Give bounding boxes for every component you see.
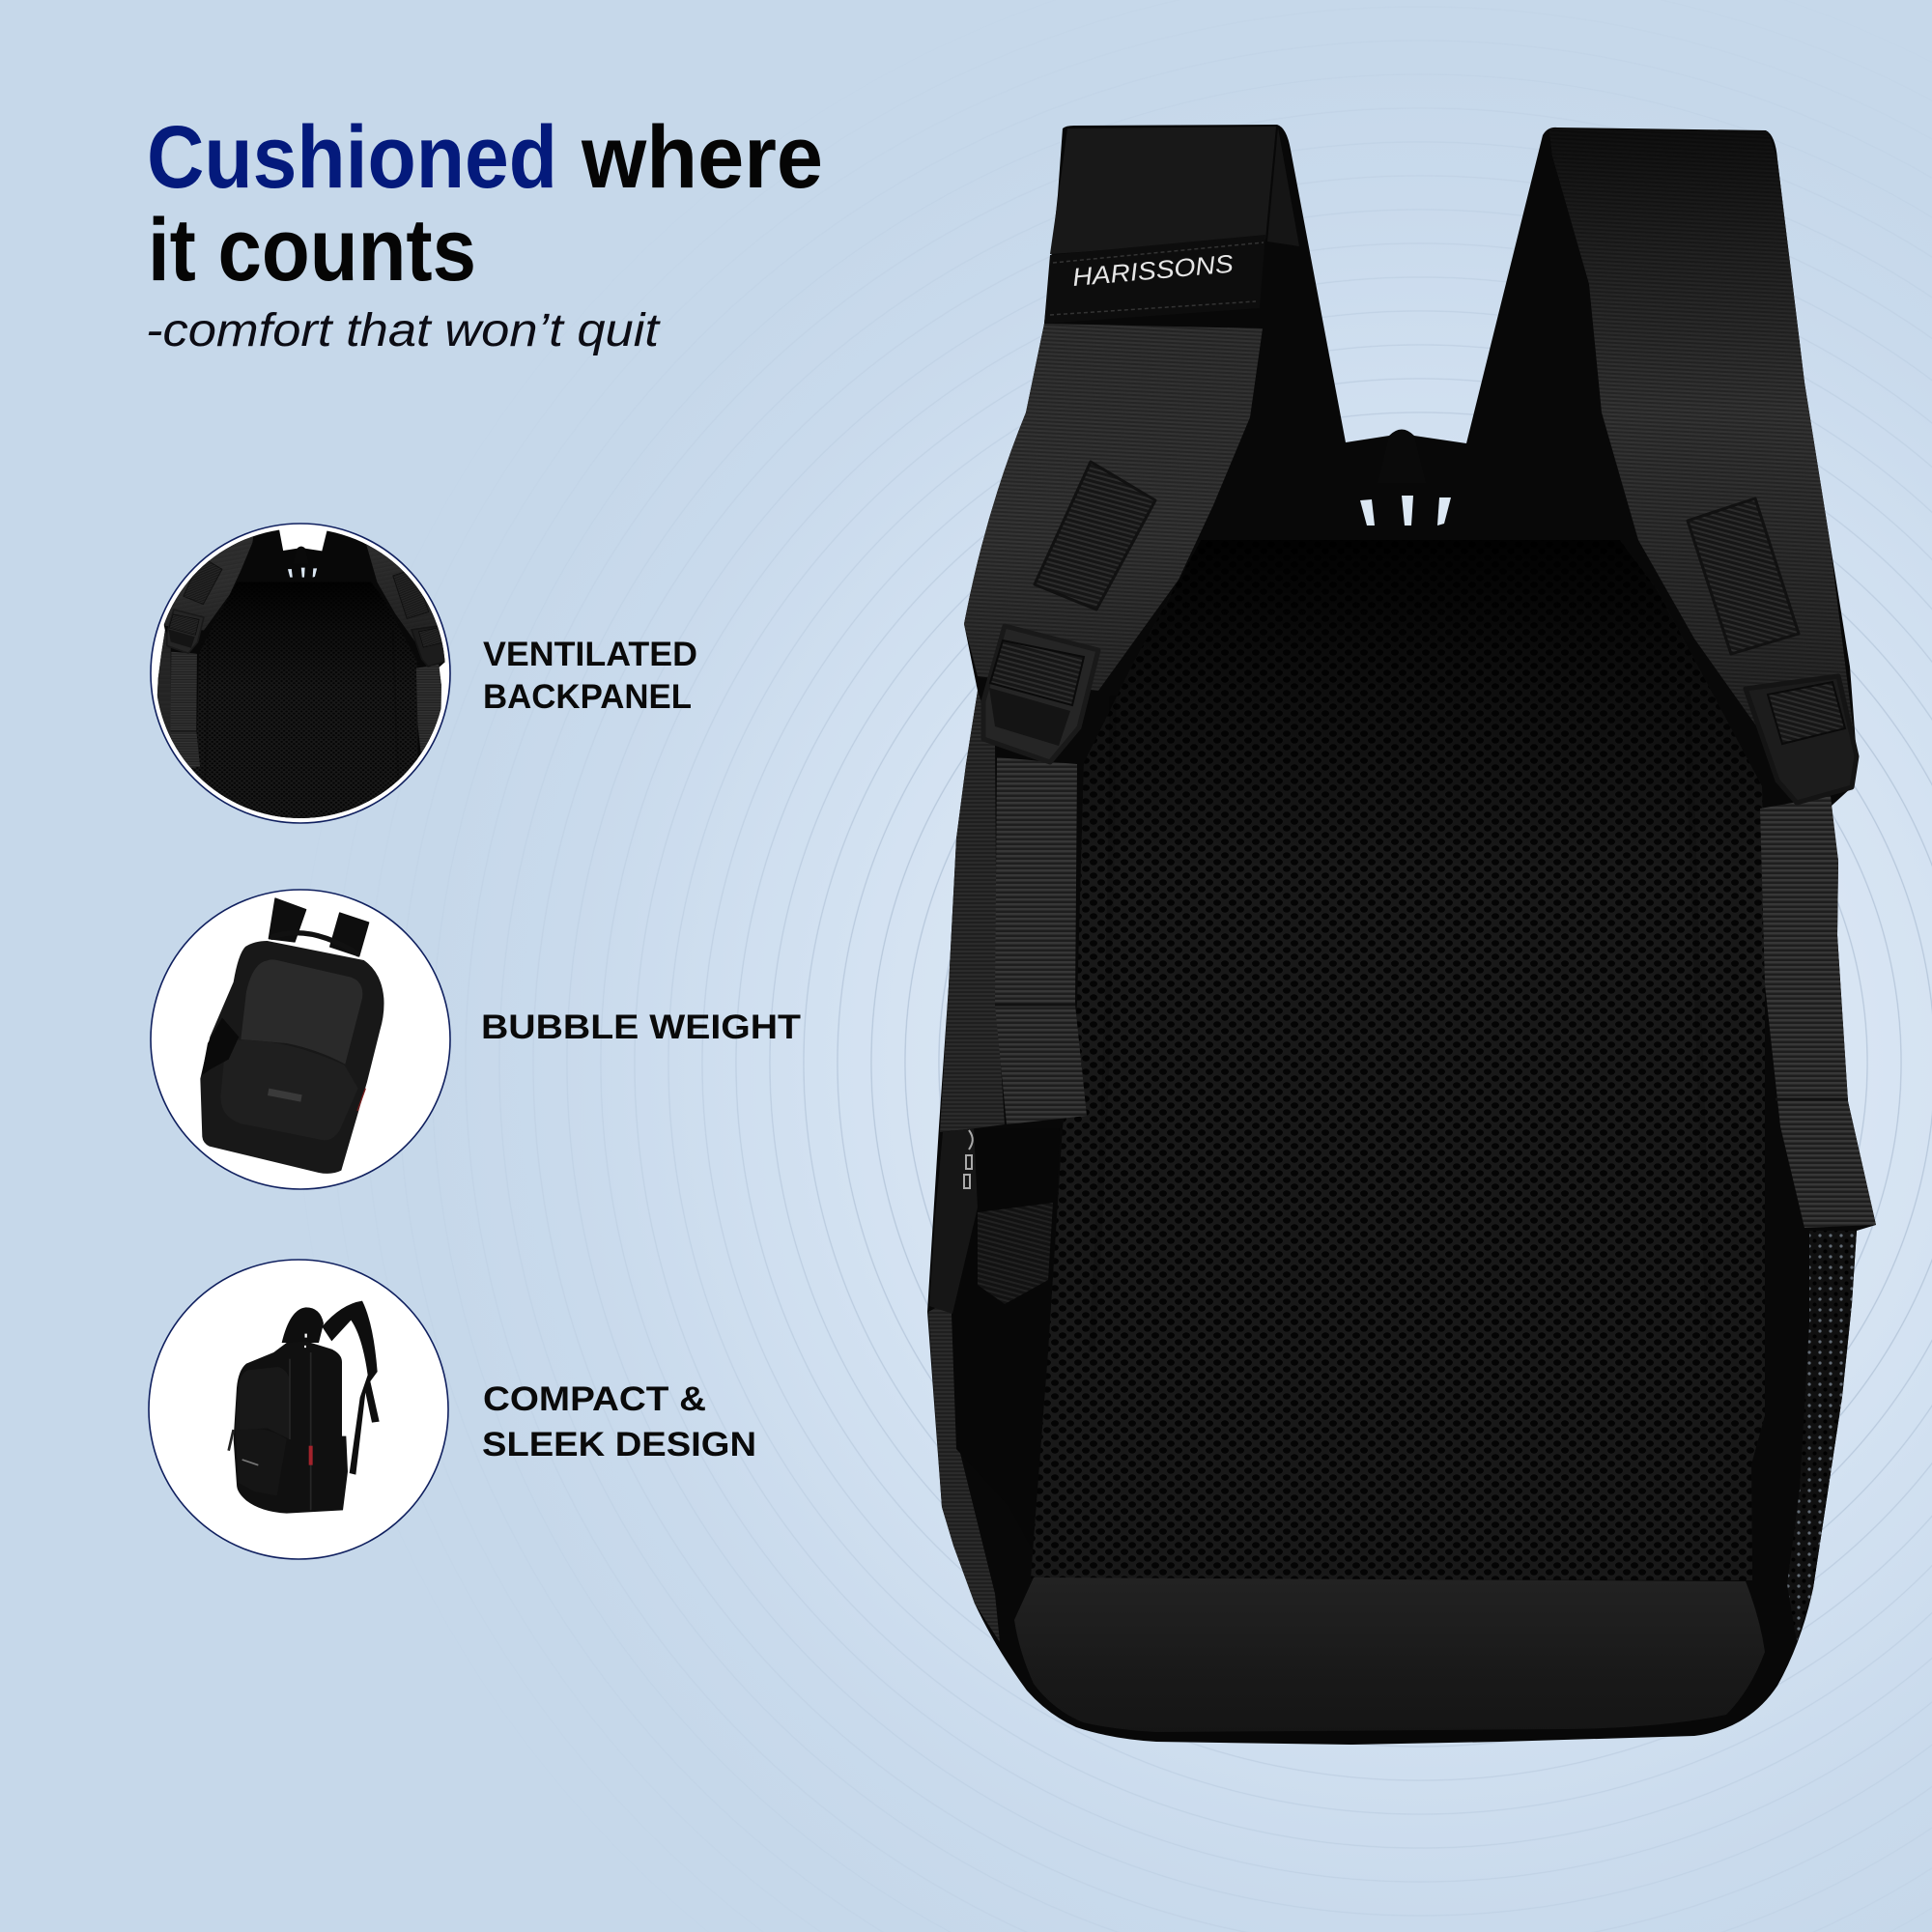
- left buckle: [983, 626, 1098, 762]
- label: compact and sleek design: SLEEK DESIGN: [482, 1426, 756, 1463]
- right mesh side pocket: [1787, 1231, 1857, 1642]
- top handle: [1378, 430, 1426, 483]
- title: it counts: [148, 201, 476, 299]
- left side fabric: [940, 691, 1005, 1132]
- brand label: HARISSONS: [1071, 248, 1236, 292]
- brand label: [1044, 235, 1265, 324]
- feature: compact and sleek design: [149, 1260, 756, 1559]
- label: ventilated backpanel: [483, 636, 697, 716]
- title: where: [581, 108, 823, 207]
- ventilation slits: [1360, 496, 1451, 526]
- icon: tilted backpack front circle: [151, 890, 450, 1189]
- title: Cushioned: [147, 108, 557, 207]
- left side pocket: [952, 1128, 1060, 1565]
- feature: bubble weight: [151, 890, 801, 1189]
- ventilated mesh back panel: [1031, 540, 1765, 1580]
- left shoulder strap: [964, 127, 1299, 691]
- right buckle: [1746, 676, 1857, 803]
- right lower webbing strap: [1760, 796, 1876, 1228]
- feature: ventilated backpanel: [149, 448, 697, 969]
- strap tab: [1688, 498, 1799, 654]
- label: compact and sleek design: [482, 1380, 756, 1463]
- pocket webbing and zipper: [929, 1128, 1053, 1314]
- label: ventilated backpanel: VENTILATED: [483, 636, 697, 673]
- right shoulder strap: [1549, 128, 1857, 782]
- subtitle: -comfort that won’t quit: [146, 305, 661, 356]
- left lower side fabric: [928, 1299, 1000, 1642]
- title: [147, 108, 823, 299]
- backpack silhouette: [927, 125, 1876, 1745]
- label: ventilated backpanel: BACKPANEL: [483, 678, 692, 716]
- label: bubble weight: BUBBLE WEIGHT: [481, 1009, 801, 1046]
- label: compact and sleek design: COMPACT &: [483, 1380, 706, 1418]
- main backpack rear view: [927, 125, 1876, 1745]
- strap tab: [1035, 462, 1155, 610]
- icon: backpanel close-up circle: [150, 523, 451, 824]
- bottom padded base: [1014, 1577, 1765, 1732]
- left lower webbing strap: [995, 757, 1087, 1124]
- icon: three-quarter backpack circle: [149, 1260, 448, 1559]
